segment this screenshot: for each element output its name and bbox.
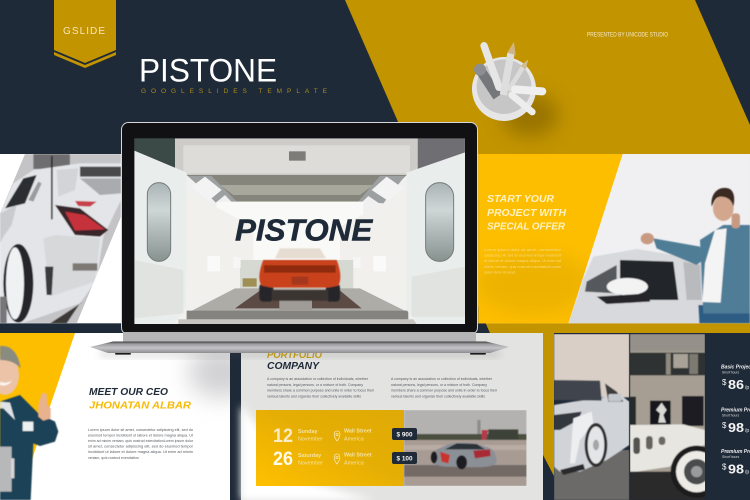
event locations: America (344, 460, 364, 466)
price: premium project two: /p (745, 470, 749, 476)
icon: location pin two (334, 454, 340, 464)
offer body text: ipsum dolor sit amet (484, 270, 515, 274)
text: company column two: A company is an association or collection of individuals, whether (391, 377, 493, 381)
orange car (259, 248, 340, 302)
text: ceo bio: eiusmod tempor incididunt ut labore et dolore magna aliqua. Ut (88, 434, 193, 438)
text: ceo bio (88, 428, 194, 460)
gslide ribbon badge (54, 0, 116, 68)
photo: man and car (568, 188, 750, 323)
photo: silver sports car (554, 334, 629, 500)
screen title: PISTONE (235, 214, 374, 248)
yellow diagonal (478, 154, 623, 323)
panel: pricing list (705, 333, 750, 500)
heading: ceo name: MEET OUR CEO (89, 386, 168, 398)
offer body text: Lorem ipsum dolor sit amet, consectetur (484, 248, 562, 252)
text: ceo bio: sit amet, consectetur adipiscing elit, sed do eiusmod tempor (88, 444, 194, 448)
panel: portfolio company (241, 333, 543, 500)
icon: pencil holder (472, 42, 558, 137)
text: ceo bio: Lorem ipsum dolor sit amet, consectetur adipiscing elit, sed do (88, 428, 193, 432)
laptop body (90, 122, 509, 355)
text: company column one: various talents and organize their collectively available skills (267, 394, 361, 398)
event dates: 12 (273, 425, 293, 447)
yellow shading (477, 253, 590, 313)
offer heading (487, 193, 566, 232)
price: premium project one: Short'hours (722, 414, 740, 418)
offer body text: minim veniam, quis nostrud exercitationLorem (484, 265, 561, 269)
text: ceo bio: incididunt ut labore et dolore magna aliqua. Ut enim ad minim (88, 450, 193, 454)
price: premium project two: 98 (728, 462, 744, 476)
event dates: Sunday (298, 429, 317, 435)
offer heading: SPECIAL OFFER (487, 220, 565, 232)
text: ceo bio: enim ad minim veniam, quis nostrud exercitationLorem ipsum dolor (88, 439, 194, 443)
gslide ribbon badge: GSLIDE (63, 26, 106, 37)
right door (407, 152, 465, 324)
text: company column one: A company is an association or collection of individuals, whether (267, 377, 369, 381)
panel: car photos (554, 334, 705, 500)
title (139, 52, 328, 95)
price: basic project: 86 (728, 377, 744, 392)
offer heading: PROJECT WITH (487, 207, 566, 219)
event dates: November (298, 460, 323, 466)
price tag 100: $ 100 (396, 456, 413, 462)
price tag 900 (392, 428, 417, 440)
title: PISTONE (139, 52, 277, 88)
event dates: Saturday (298, 453, 321, 459)
price: premium project two: $ (722, 462, 727, 472)
left door (134, 151, 187, 324)
event locations: Wall Street (344, 428, 372, 434)
offer heading: START YOUR (487, 193, 554, 205)
panel: right offer slide (477, 154, 750, 323)
gold diagonal shape (345, 0, 750, 476)
photo: drift car (404, 410, 527, 486)
yellow events band (256, 410, 404, 486)
event locations: America (344, 436, 364, 442)
laptop screen photo (134, 138, 465, 324)
text: company column one (267, 377, 375, 398)
panel: meet our ceo (0, 333, 230, 500)
heading: ceo name: JHONATAN ALBAR (89, 400, 191, 412)
title: GOOGLESLIDES TEMPLATE (141, 88, 328, 95)
laptop mockup (90, 122, 509, 357)
text: company column two (391, 377, 498, 398)
price: premium project two (721, 449, 750, 476)
event dates (273, 425, 323, 470)
text: company column one: natural persons, legal persons, or a mixture of both. Company (267, 383, 363, 387)
price tag 900: $ 900 (396, 432, 413, 438)
event dates: 26 (273, 448, 293, 470)
photo: vintage white car (630, 334, 705, 500)
event locations: Wall Street (344, 452, 372, 458)
price: premium project one (721, 408, 750, 435)
text: company column two: various talents and organize their collectively available skills (391, 394, 485, 398)
text: company column one: members share a common purpose and unite in order to focus their (267, 388, 375, 392)
heading: portfolio company: PORTFOLIO (267, 350, 322, 361)
event dates: November (298, 436, 323, 442)
price: premium project one: $ (722, 421, 727, 430)
price: basic project: /p (745, 385, 749, 391)
price: basic project (721, 364, 750, 392)
price: basic project: Short'hours (722, 370, 740, 374)
presented by label: PRESENTED BY UNICODE STUDIO (587, 32, 668, 38)
offer body text: adipiscing elit, sed do eiusmod tempor incididunt (484, 254, 561, 258)
offer body text: ut labore et dolore magna aliqua. Ut enim ad (484, 259, 561, 263)
heading: portfolio company: COMPANY (267, 361, 320, 372)
price: premium project one: 98 (728, 420, 744, 435)
price: premium project two: Short'hours (722, 455, 740, 459)
event locations (344, 428, 372, 466)
laptop shadow (100, 351, 500, 357)
heading: ceo name (89, 386, 191, 412)
price: premium project one: /p (745, 428, 749, 434)
offer body text (484, 248, 562, 274)
text: company column two: natural persons, legal persons, or a mixture of both. Company (391, 383, 487, 387)
photo: ceo portrait (0, 346, 58, 500)
heading: portfolio company (267, 350, 322, 372)
text: ceo bio: veniam, quis nostrud exercitation (88, 456, 139, 460)
icon: location pin one (334, 431, 340, 441)
text: company column two: members share a common purpose and unite in order to focus their (391, 388, 498, 392)
price tag 100 (392, 452, 417, 464)
price: basic project: $ (722, 378, 727, 387)
yellow diagonal (0, 333, 75, 465)
panel: left car photo (0, 154, 121, 323)
